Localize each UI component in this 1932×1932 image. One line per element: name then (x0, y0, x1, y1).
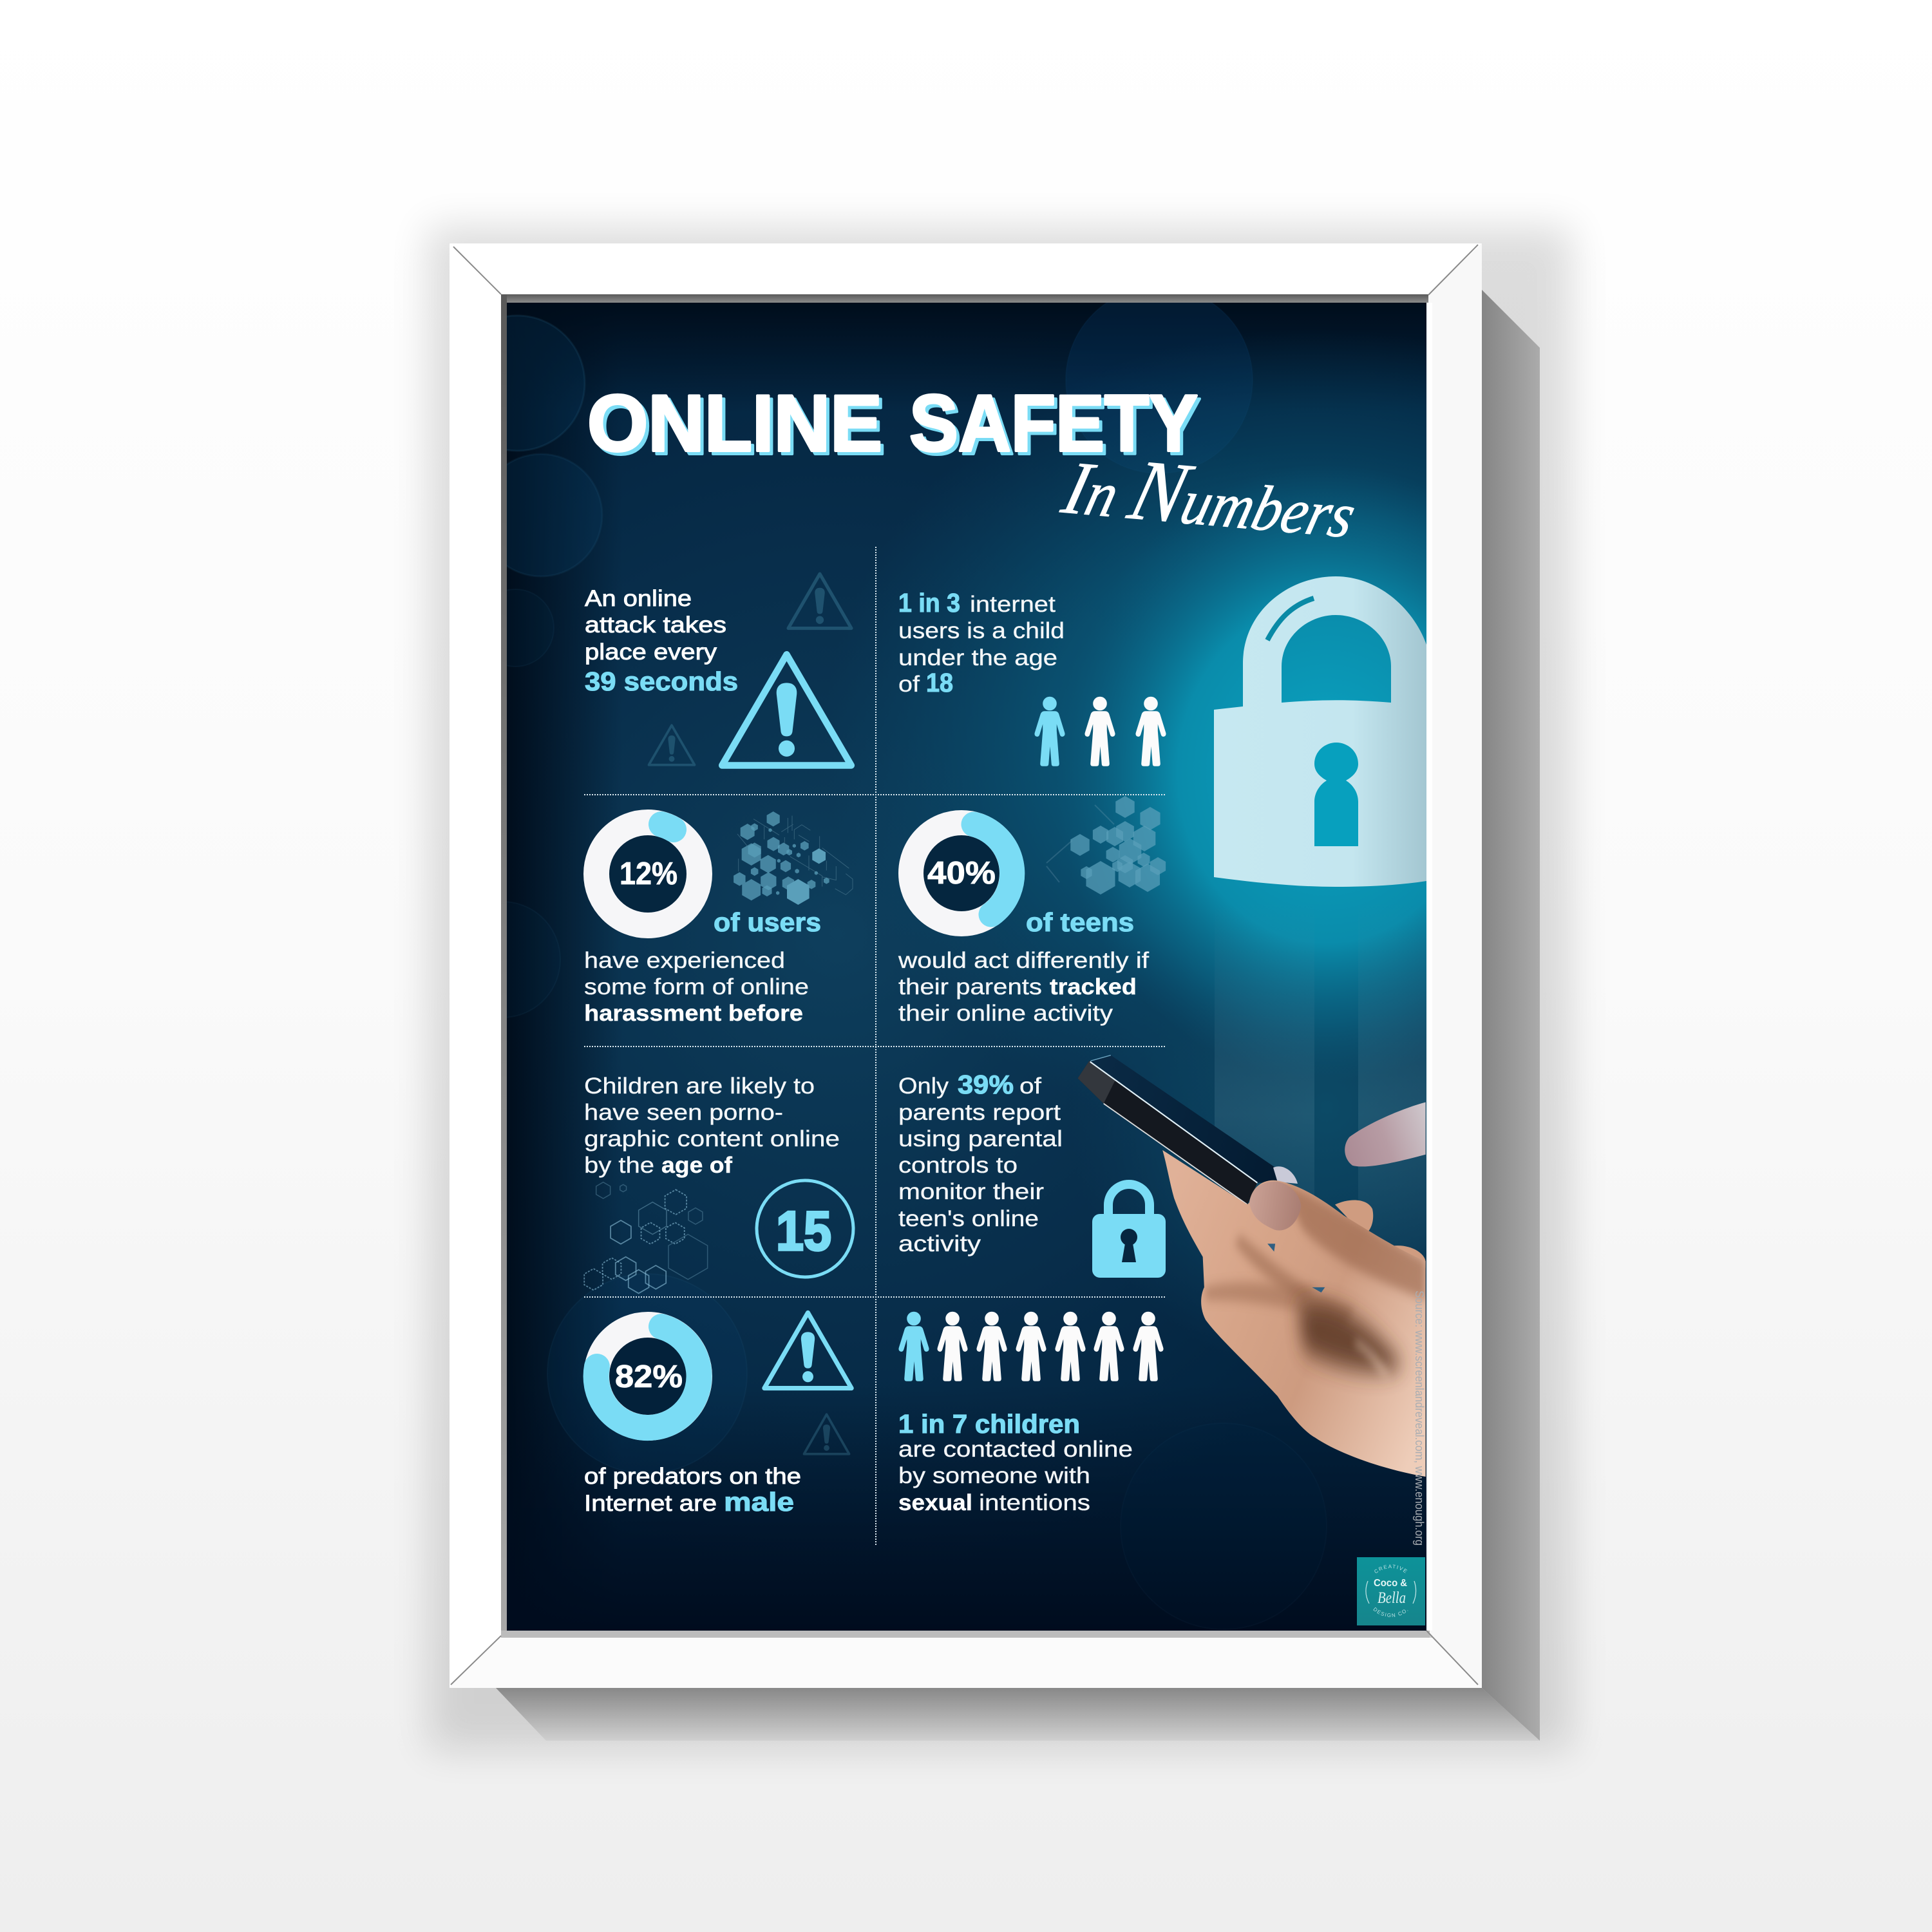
frame drop shadow (428, 227, 1571, 1750)
warning icon (764, 1312, 851, 1388)
poster artwork (444, 287, 1426, 1631)
panel: 1 in 3 (898, 588, 1166, 766)
predators text (584, 1464, 801, 1517)
1 in 3 text: of (898, 672, 920, 697)
tracked text: tracked (1050, 974, 1137, 999)
panel: 1 in 7 children (898, 1312, 1163, 1515)
harassment text: some form of online (584, 974, 809, 999)
logo: Coco and Bella: CREATIVE (1374, 1565, 1408, 1573)
attack text: attack takes (585, 612, 726, 638)
age text: age of (661, 1153, 732, 1178)
parental controls text: parents report (898, 1100, 1061, 1125)
faded warning icon small (649, 725, 695, 765)
parental controls text: controls to (898, 1153, 1018, 1178)
panel: parental controls (898, 1070, 1166, 1278)
parental controls text: of (1019, 1074, 1041, 1099)
age text: graphic content online (584, 1126, 840, 1151)
parental controls text: activity (898, 1231, 981, 1256)
donut 40% (911, 823, 1012, 923)
panel: predators (584, 1312, 851, 1517)
logo: Coco and Bella (1357, 1557, 1425, 1625)
lower teal haze (1140, 1045, 1426, 1312)
parental controls text: monitor their (898, 1179, 1044, 1204)
icon: big padlock (1214, 576, 1426, 887)
number 15 circle (757, 1180, 853, 1277)
parental controls text (898, 1070, 1063, 1256)
warning icon large (722, 654, 851, 765)
panel: 12 percent of users (584, 811, 853, 1026)
1 in 3 text: internet (970, 592, 1056, 617)
icon: small padlock (1092, 1184, 1166, 1278)
parental controls text: 39% (958, 1070, 1014, 1099)
attack text: place every (585, 639, 717, 665)
1 in 3 text (898, 588, 1065, 697)
people icons 3 (1035, 697, 1166, 766)
lock glow (1096, 493, 1426, 1054)
children text: by someone with (898, 1463, 1090, 1488)
tracked text: would act differently if (898, 948, 1149, 973)
white picture frame (450, 243, 1482, 1688)
children text: sexual (898, 1490, 972, 1515)
tracked text: their online activity (898, 1001, 1113, 1026)
1 in 3 text: users is a child (898, 618, 1065, 643)
light beams below lock (1215, 992, 1426, 1215)
parental controls text: teen's online (898, 1206, 1039, 1231)
hexagon outlines (584, 1182, 708, 1293)
harassment text: have experienced (584, 948, 785, 973)
icon: phone (1077, 1056, 1298, 1204)
predators text: Internet are (584, 1491, 717, 1516)
title: ONLINE (591, 383, 886, 471)
donut 12%: 12% (620, 857, 677, 891)
children text: 1 in 7 children (898, 1409, 1080, 1439)
divider lines (584, 547, 1165, 1546)
donut 12% (596, 822, 699, 925)
age text (584, 1074, 840, 1178)
title (587, 379, 1201, 471)
attack text: An online (585, 586, 692, 611)
age text: by the (584, 1153, 654, 1178)
1 in 3 text: under the age (898, 645, 1057, 670)
children text: intentions (979, 1490, 1090, 1515)
predators text: male (724, 1487, 794, 1517)
panel: 40 percent of teens (898, 796, 1166, 1026)
of teens label: of teens (1026, 907, 1134, 937)
people icons 7 (899, 1312, 1163, 1381)
logo: Coco and Bella: Coco & (1374, 1578, 1407, 1589)
hexagon cluster (734, 811, 853, 905)
source credit: Source: www.screenlandreveal.com, www.enough.org (1413, 1291, 1426, 1546)
poster background (444, 287, 1426, 1631)
harassment text (584, 948, 809, 1026)
predators text: of predators on the (584, 1464, 801, 1489)
faded warning icon (804, 1414, 849, 1454)
children text (898, 1409, 1133, 1515)
parental controls text: using parental (898, 1126, 1063, 1151)
panel: online attack (585, 574, 851, 765)
photo: hand holding phone (1162, 1103, 1426, 1477)
age text: Children are likely to (584, 1074, 815, 1099)
number 15 circle: 15 (776, 1200, 831, 1262)
age text: have seen porno- (584, 1100, 783, 1125)
title: ONLINE (587, 379, 882, 468)
parental controls text: Only (898, 1074, 949, 1099)
donut 82% (596, 1325, 699, 1428)
donut 40%: 40% (927, 856, 996, 891)
tracked text (898, 948, 1149, 1026)
harassment text: harassment before (584, 1001, 803, 1026)
wide teal haze (904, 361, 1426, 1030)
attack text: 39 seconds (585, 667, 738, 696)
1 in 3 text: 1 in 3 (898, 588, 960, 618)
of users label: of users (714, 907, 821, 937)
attack text (585, 586, 738, 696)
logo: Coco and Bella: DESIGN CO. (1373, 1607, 1408, 1617)
title: SAFETY (913, 383, 1201, 471)
panel: age of 15 (584, 1074, 853, 1293)
donut 82%: 82% (615, 1359, 683, 1394)
1 in 3 text: 18 (926, 668, 953, 697)
logo: Coco and Bella: Bella (1378, 1589, 1406, 1607)
hexagon cluster (1046, 796, 1166, 895)
tracked text: their parents (898, 974, 1042, 999)
title: SAFETY (909, 379, 1198, 468)
faded warning icon top (788, 574, 851, 629)
subtitle script: In Numbers (1054, 437, 1368, 556)
children text: are contacted online (898, 1437, 1133, 1462)
